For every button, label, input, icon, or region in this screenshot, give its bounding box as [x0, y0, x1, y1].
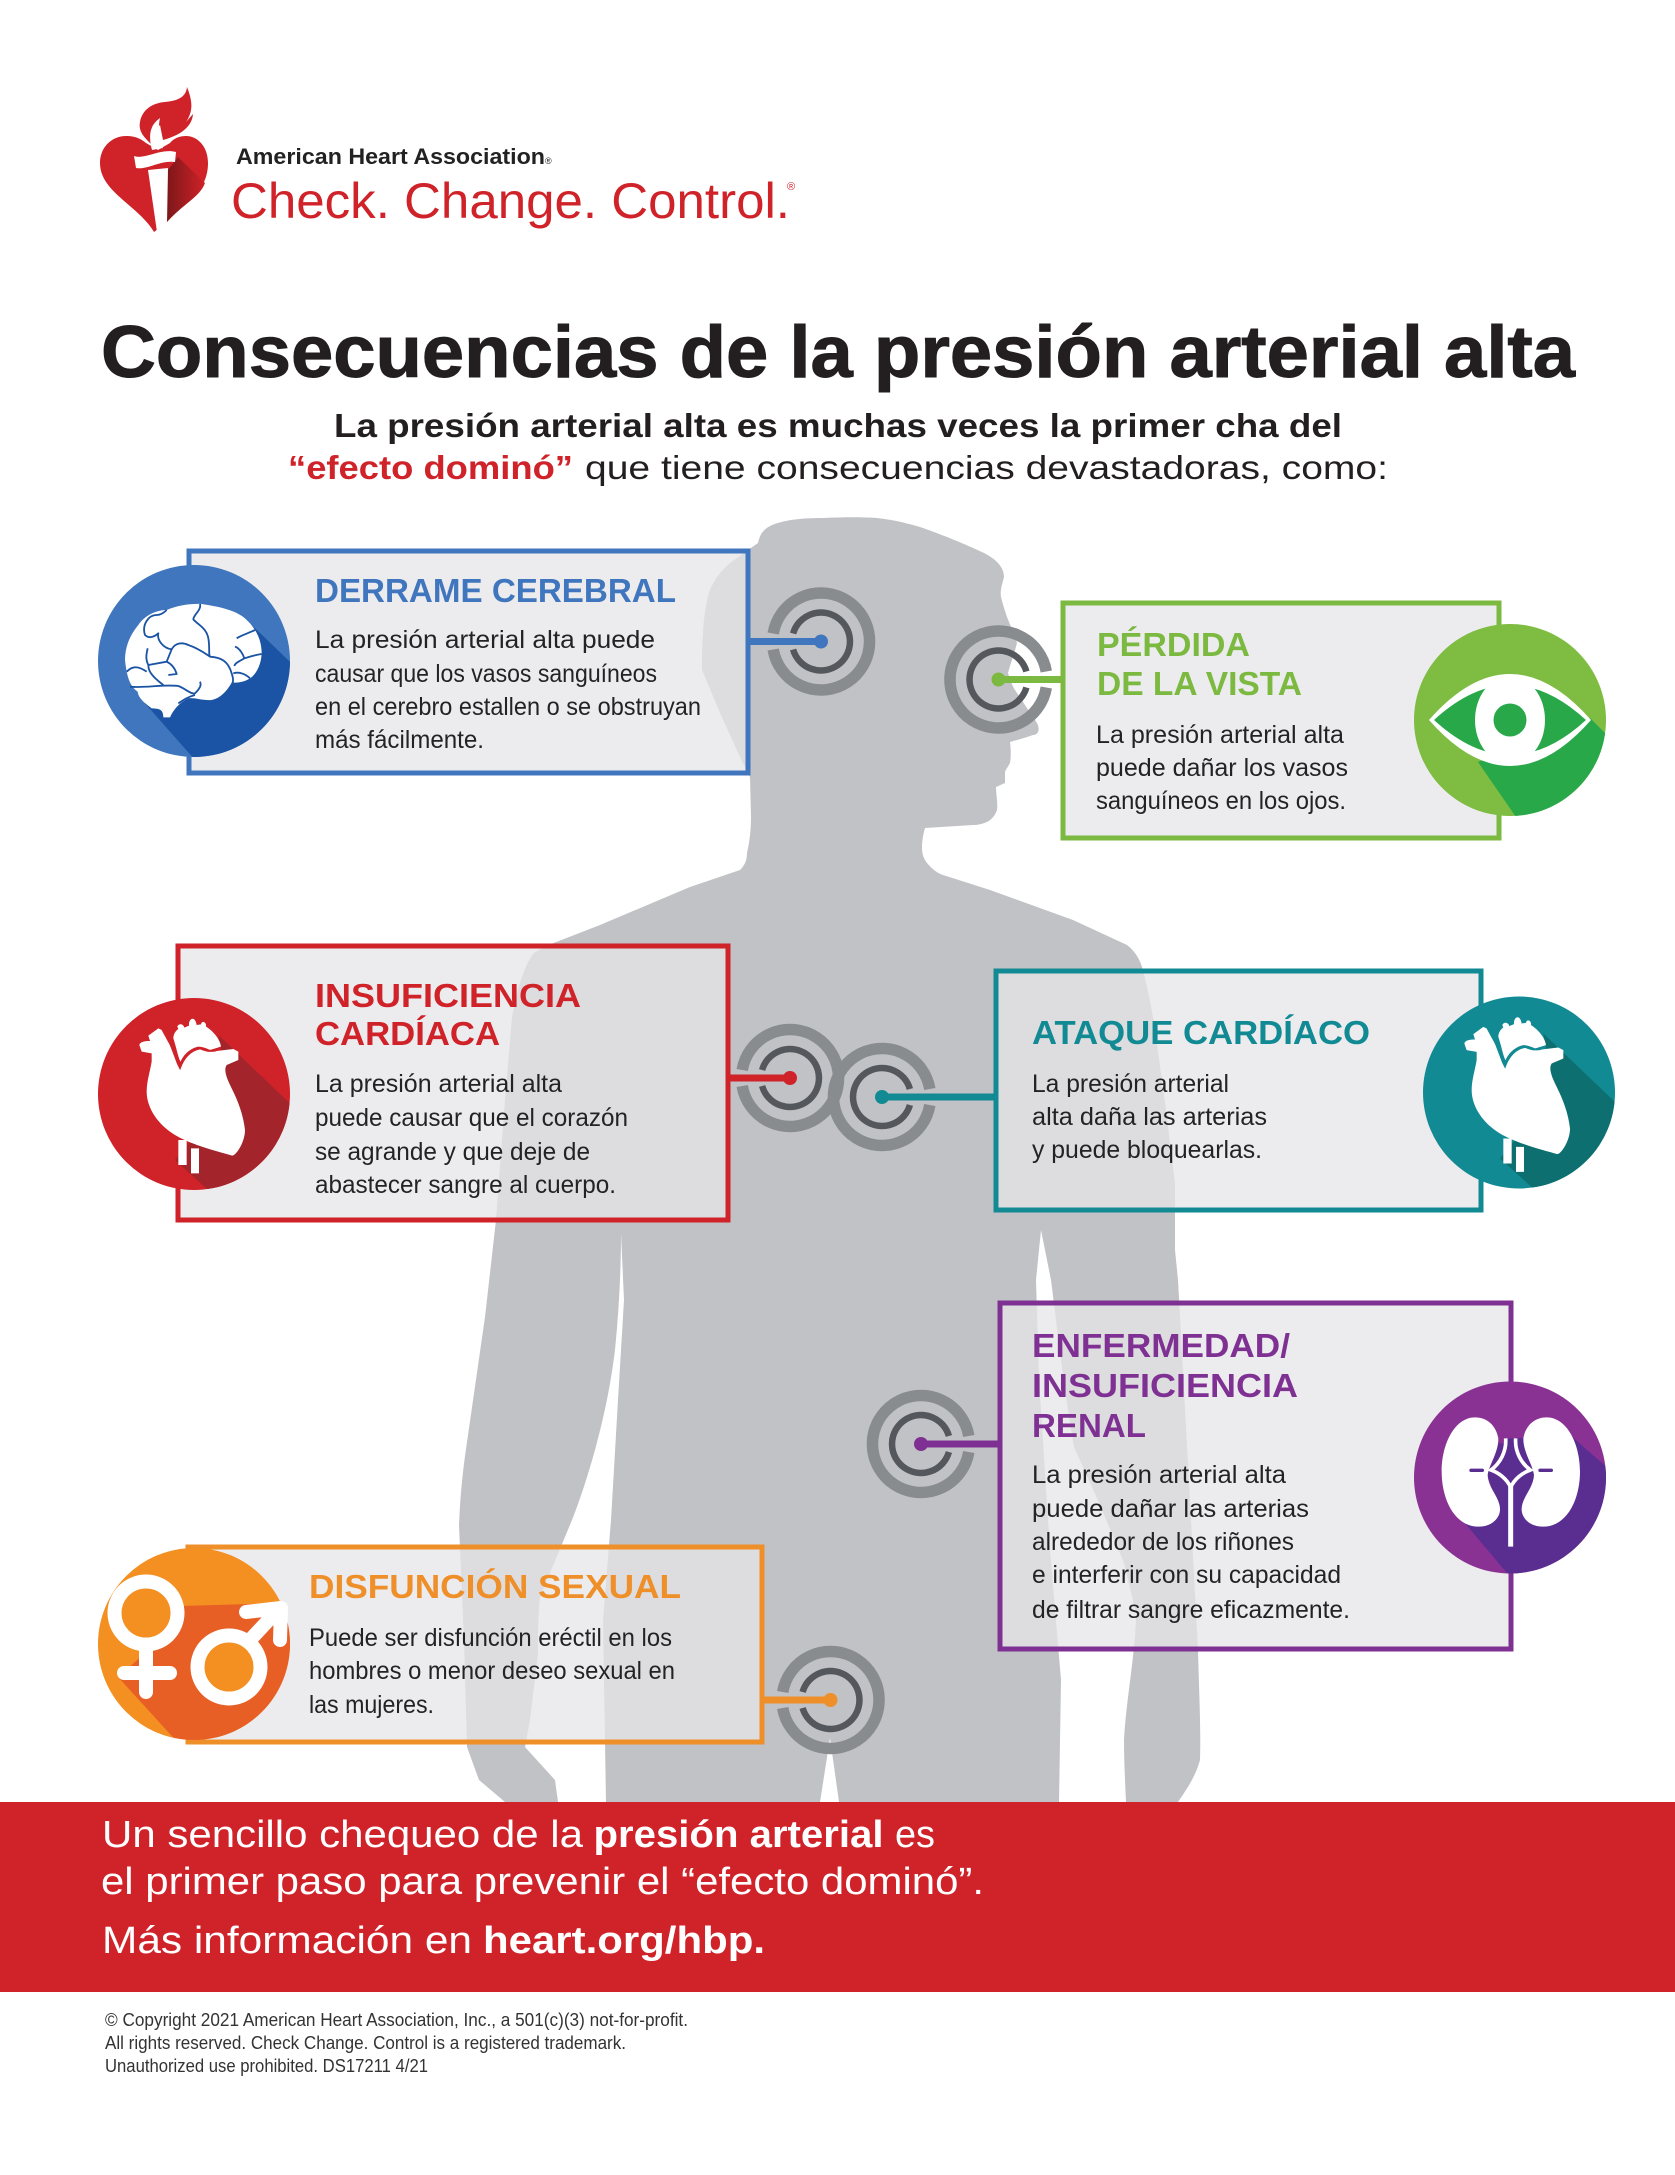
panel text: Puede ser disfunción eréctil en los: [309, 1624, 672, 1652]
band line 1: Un sencillo chequeo de la: [102, 1814, 584, 1856]
panel text: en el cerebro estallen o se obstruyan: [315, 693, 701, 721]
panel text: puede dañar los vasos: [1096, 754, 1348, 782]
panel text: [1096, 721, 1348, 815]
icon: heart: [1423, 996, 1620, 1193]
subtitle: [288, 407, 1388, 486]
panel text: más fácilmente.: [315, 726, 484, 754]
copyright footer: Unauthorized use prohibited. DS17211 4/21: [105, 2056, 428, 2076]
panel box: [188, 1547, 762, 1742]
connector: [748, 634, 828, 648]
panel heading: [1097, 626, 1302, 702]
panel text: La presión arterial alta puede: [315, 626, 655, 654]
body silhouette: [459, 517, 1200, 1802]
icon: gender symbols: [98, 1548, 295, 1745]
panel text: [309, 1624, 675, 1719]
panel: disfuncion sexual: [98, 1547, 879, 1748]
panel text: causar que los vasos sanguíneos: [315, 660, 657, 688]
subtitle line 2: que tiene consecuencias devastadoras, como:: [585, 449, 1388, 486]
panel text: La presión arterial alta: [1096, 721, 1344, 749]
panel box: [996, 971, 1481, 1210]
panel text: La presión arterial alta: [1032, 1461, 1286, 1489]
panel: derrame cerebral: [98, 551, 870, 773]
logo: [100, 87, 795, 232]
panel heading: PÉRDIDA: [1097, 626, 1250, 663]
panel heading: INSUFICIENCIA: [315, 977, 581, 1014]
icon: heart and torch: [100, 87, 208, 232]
panel text: [1032, 1461, 1350, 1624]
panel text: puede dañar las arterias: [1032, 1495, 1309, 1523]
band line 1 bold: presión arterial: [594, 1814, 884, 1856]
band line 2: el primer paso para prevenir el “efecto dominó”.: [101, 1861, 984, 1903]
registered mark: ®: [545, 156, 552, 166]
panel text: puede causar que el corazón: [315, 1104, 628, 1132]
target: [872, 1396, 969, 1492]
connector: [762, 1693, 838, 1707]
slogan registered mark: ®: [787, 181, 795, 193]
icon: kidneys: [1414, 1382, 1610, 1580]
panel text: de filtrar sangre eficazmente.: [1032, 1596, 1350, 1624]
slogan: Check. Change. Control.: [231, 173, 790, 229]
panel box: [178, 946, 728, 1220]
panel box: [1063, 603, 1499, 838]
subtitle red emphasis: “efecto dominó”: [288, 449, 573, 486]
panel text: y puede bloquearlas.: [1032, 1136, 1262, 1164]
organization name: American Heart Association: [236, 144, 545, 169]
connector: [992, 672, 1064, 686]
panel: ataque cardiaco: [833, 971, 1620, 1210]
panel text: abastecer sangre al cuerpo.: [315, 1171, 616, 1199]
title: Consecuencias de la presión arterial alta: [101, 312, 1576, 393]
panel text: hombres o menor deseo sexual en: [309, 1657, 675, 1685]
panel heading: [1032, 1327, 1298, 1444]
icon: brain: [98, 565, 295, 760]
target: [773, 593, 870, 690]
panel text: sanguíneos en los ojos.: [1096, 787, 1346, 815]
connector: [728, 1071, 797, 1085]
panel text: [315, 1070, 628, 1199]
panel text: [1032, 1070, 1267, 1164]
connector: [914, 1437, 1000, 1451]
copyright footer: [105, 2010, 688, 2076]
panel box: [189, 551, 748, 773]
panel text: las mujeres.: [309, 1691, 434, 1719]
panel text: alrededor de los riñones: [1032, 1528, 1294, 1556]
panel heading: INSUFICIENCIA: [1032, 1367, 1298, 1404]
connector: [875, 1090, 996, 1104]
panel: enfermedad renal: [872, 1303, 1610, 1649]
panel box: [1000, 1303, 1511, 1649]
panel heading: ENFERMEDAD/: [1032, 1327, 1290, 1364]
panel text: La presión arterial alta: [315, 1070, 562, 1098]
panel heading: CARDÍACA: [315, 1015, 500, 1052]
panel text: alta daña las arterias: [1032, 1103, 1267, 1131]
target: [742, 1030, 839, 1126]
panel heading: DISFUNCIÓN SEXUAL: [309, 1568, 681, 1605]
red call-to-action band: [0, 1802, 1675, 1992]
panel: perdida de la vista: [950, 603, 1610, 838]
panel heading: ATAQUE CARDÍACO: [1032, 1014, 1370, 1051]
target: [783, 1652, 879, 1748]
band line 3: Más información en: [102, 1920, 472, 1962]
band link: heart.org/hbp.: [483, 1920, 765, 1962]
panel text: La presión arterial: [1032, 1070, 1229, 1098]
copyright footer: All rights reserved. Check Change. Control is a registered trademark.: [105, 2033, 626, 2053]
panel heading: RENAL: [1032, 1407, 1146, 1444]
subtitle line 1: La presión arterial alta es muchas veces la primer cha del: [334, 407, 1342, 444]
panel heading: DERRAME CEREBRAL: [315, 572, 676, 609]
target: [833, 1048, 930, 1146]
band background: [0, 1802, 1675, 1992]
panel text: [315, 626, 701, 754]
icon: eye: [1414, 624, 1610, 820]
panel: insuficiencia cardiaca: [98, 946, 839, 1220]
copyright footer: © Copyright 2021 American Heart Association, Inc., a 501(c)(3) not-for-profit.: [105, 2010, 688, 2030]
panel text: se agrande y que deje de: [315, 1138, 590, 1166]
icon: heart: [98, 998, 295, 1195]
panel heading: [315, 977, 581, 1052]
panel heading: DE LA VISTA: [1097, 665, 1302, 702]
band line 1 end: es: [895, 1814, 935, 1856]
panel text: e interferir con su capacidad: [1032, 1561, 1341, 1589]
target: [950, 631, 1046, 728]
